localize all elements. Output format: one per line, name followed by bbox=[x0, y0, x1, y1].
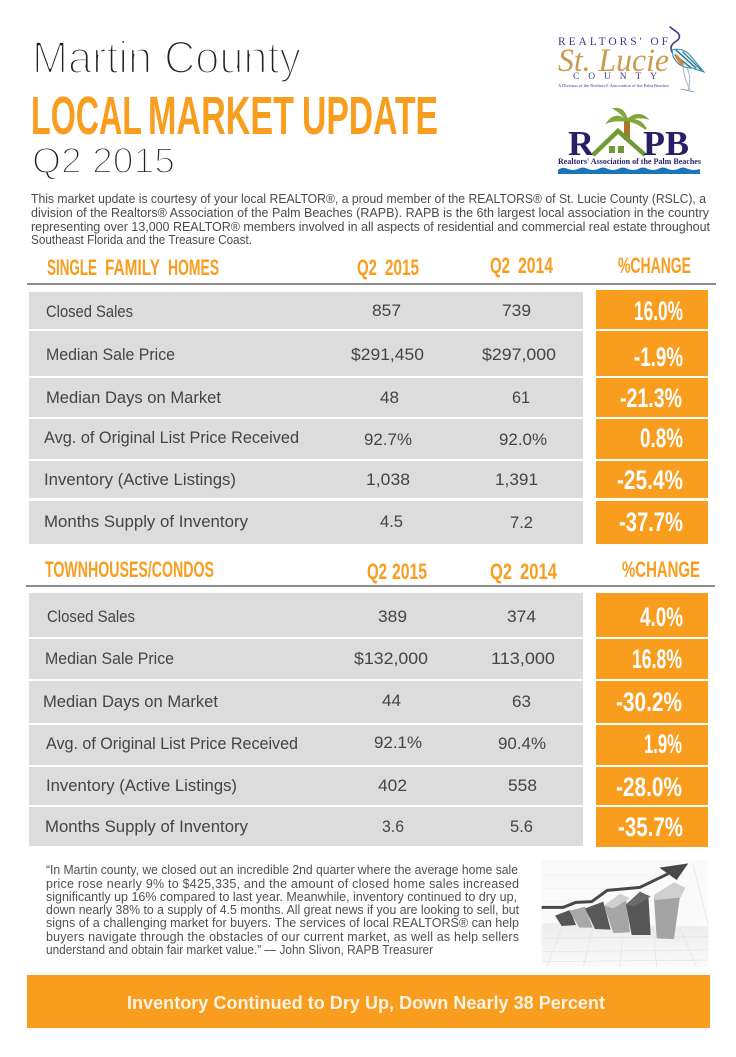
row: inventory: Inventory (Active Listings) bbox=[44, 470, 236, 489]
table header: single family homes: Q2 bbox=[357, 255, 377, 280]
row: average of original list price received: 92.0% bbox=[499, 430, 547, 449]
row: months supply: Months Supply of Inventory bbox=[44, 512, 248, 531]
row: median sale price bbox=[29, 331, 708, 376]
table header: single family homes: FAMILY bbox=[105, 255, 160, 280]
row: inventory bbox=[29, 461, 708, 498]
row: closed sales: 374 bbox=[507, 607, 536, 626]
row: average of original list price received: 92.1% bbox=[374, 733, 422, 752]
table header: townhouses and condos: Q2 bbox=[367, 559, 387, 584]
row: inventory: -25.4% bbox=[617, 465, 683, 495]
text block: quote: price rose nearly 9% to $425,335, and the amount of closed home sales increased bbox=[46, 877, 519, 891]
row: median sale price: -1.9% bbox=[634, 342, 683, 372]
row: average of original list price received: 90.4% bbox=[498, 734, 546, 753]
row: median days on market bbox=[29, 378, 708, 417]
row: closed sales: 857 bbox=[372, 301, 401, 320]
row: months supply: 7.2 bbox=[510, 513, 533, 532]
row: closed sales: Closed Sales bbox=[47, 607, 135, 626]
table header: single family homes: 2014 bbox=[518, 253, 554, 278]
text block: quote: significantly up 16% compared to last year. Meanwhile, inventory continued to dry up, bbox=[46, 890, 517, 904]
row: median sale price: $291,450 bbox=[351, 345, 424, 364]
row: inventory bbox=[29, 767, 708, 805]
text block: quote: “In Martin county, we closed out an incredible 2nd quarter where the average home sale bbox=[46, 863, 518, 877]
logo: Realtors of St. Lucie County: COUNTY bbox=[573, 72, 657, 82]
logo: Realtors of St. Lucie County bbox=[558, 27, 704, 92]
text block: quote: buyers navigate through the obstacles of our current market, as well as help sellers bbox=[46, 930, 519, 944]
row: closed sales: 389 bbox=[378, 607, 407, 626]
row: months supply: Months Supply of Inventory bbox=[45, 817, 248, 836]
row: average of original list price received bbox=[29, 419, 708, 459]
logo: RAPB: Realtors' Association of the Palm Beaches bbox=[558, 156, 702, 166]
bars bbox=[555, 910, 576, 926]
banner: inventory callout bbox=[27, 975, 710, 1028]
icon: house bbox=[593, 131, 645, 155]
subtitle: Q2 2015: Q2 2015 bbox=[32, 140, 175, 181]
logo: Realtors of St. Lucie County: A Division of the Realtors® Association of the Palm Beaches bbox=[558, 83, 669, 88]
row: months supply: 3.6 bbox=[382, 817, 404, 836]
row: inventory: 1,391 bbox=[495, 470, 538, 489]
row: average of original list price received bbox=[29, 725, 708, 765]
row: median sale price bbox=[29, 639, 708, 679]
table header: townhouses and condos: Q2 bbox=[490, 559, 512, 584]
table header: townhouses and condos: %CHANGE bbox=[622, 557, 700, 582]
row: months supply bbox=[29, 807, 708, 847]
panel: single family homes bbox=[27, 253, 716, 544]
row: months supply: 5.6 bbox=[510, 817, 533, 836]
row: months supply bbox=[29, 501, 708, 544]
arrow bbox=[542, 874, 668, 907]
row: median days on market: 63 bbox=[512, 692, 531, 711]
icon: palm tree bbox=[608, 109, 646, 140]
row: inventory: 402 bbox=[378, 776, 407, 795]
heading: Local Market Update bbox=[31, 86, 438, 146]
row: median sale price: 16.8% bbox=[632, 644, 682, 674]
table header: townhouses and condos bbox=[26, 557, 715, 587]
row: median sale price: $132,000 bbox=[354, 649, 428, 668]
table header: single family homes: HOMES bbox=[168, 255, 219, 280]
row: median sale price: Median Sale Price bbox=[45, 649, 174, 668]
icon: waves bbox=[558, 168, 700, 174]
row: closed sales bbox=[29, 593, 708, 637]
row: closed sales bbox=[29, 290, 708, 329]
table header: single family homes: Q2 bbox=[490, 253, 510, 278]
row: inventory: 1,038 bbox=[366, 470, 410, 489]
row: closed sales: 16.0% bbox=[634, 296, 683, 326]
logo: RAPB: PB bbox=[643, 124, 689, 163]
row: inventory: 558 bbox=[508, 776, 537, 795]
row: median days on market: 44 bbox=[382, 691, 401, 710]
logo: RAPB bbox=[558, 109, 702, 174]
row: median sale price: $297,000 bbox=[482, 345, 556, 364]
text block: quote: down nearly 38% to a supply of 4.5 months. All great news if you are looking to sell, but bbox=[46, 903, 520, 917]
row: average of original list price received: 92.7% bbox=[364, 430, 412, 449]
table header: single family homes bbox=[27, 253, 716, 285]
chart image: rising bars and arrow bbox=[542, 860, 708, 967]
row: inventory: Inventory (Active Listings) bbox=[46, 776, 237, 795]
row: median days on market bbox=[29, 681, 708, 723]
table header: townhouses and condos: TOWNHOUSES/CONDOS bbox=[45, 557, 214, 582]
table header: single family homes: 2015 bbox=[385, 255, 419, 280]
row: median days on market: Median Days on Market bbox=[46, 388, 221, 407]
text block: quote: signs of a challenging market for buyers. The services of local REALTORS® can help bbox=[46, 916, 519, 930]
row: median sale price: 113,000 bbox=[491, 649, 555, 668]
table header: single family homes: %CHANGE bbox=[618, 253, 691, 278]
row: months supply: -37.7% bbox=[619, 507, 683, 537]
text block: quote: understand and obtain fair market value.” — John Slivon, RAPB Treasurer bbox=[46, 943, 433, 957]
text block: introduction: division of the Realtors® Association of the Palm Beaches (RAPB). RAPB is the 6th largest local association in the country bbox=[31, 206, 710, 220]
row: median sale price: Median Sale Price bbox=[46, 345, 175, 364]
text block: quote bbox=[46, 863, 520, 957]
table header: single family homes: SINGLE bbox=[47, 255, 97, 280]
heading: Local Market Update: MARKET bbox=[148, 86, 294, 146]
row: average of original list price received: Avg. of Original List Price Received bbox=[46, 734, 298, 753]
row: average of original list price received: 1.9% bbox=[644, 729, 682, 759]
row: median days on market: -30.2% bbox=[616, 687, 682, 717]
row: median days on market: 61 bbox=[512, 388, 530, 407]
table header: townhouses and condos: 2014 bbox=[520, 559, 558, 584]
row: closed sales: 739 bbox=[502, 301, 531, 320]
logo: RAPB: R bbox=[568, 124, 595, 163]
panel: townhouses and condos bbox=[26, 557, 715, 847]
table header: townhouses and condos: 2015 bbox=[392, 559, 427, 584]
row: months supply: 4.5 bbox=[380, 512, 403, 531]
row: average of original list price received: 0.8% bbox=[640, 423, 683, 453]
row: average of original list price received: Avg. of Original List Price Received bbox=[44, 428, 299, 447]
heading: Local Market Update: UPDATE bbox=[302, 86, 438, 146]
text block: introduction bbox=[31, 192, 711, 247]
icon: heron bbox=[670, 27, 704, 92]
row: inventory: -28.0% bbox=[616, 772, 682, 802]
logo: Realtors of St. Lucie County: REALTORS' OF bbox=[558, 36, 668, 48]
banner: inventory callout: Inventory Continued to Dry Up, Down Nearly 38 Percent bbox=[127, 993, 605, 1013]
row: months supply: -35.7% bbox=[618, 812, 683, 842]
row: median days on market: Median Days on Market bbox=[43, 692, 218, 711]
row: closed sales: Closed Sales bbox=[46, 302, 133, 321]
text block: introduction: representing over 13,000 REALTOR® members involved in all aspects of residential and commercial real estate throughout bbox=[31, 220, 711, 234]
logo: Realtors of St. Lucie County: St. Lucie bbox=[558, 43, 669, 79]
row: median days on market: 48 bbox=[380, 388, 399, 407]
title: Martin County: Martin County bbox=[32, 32, 301, 83]
heading: Local Market Update: LOCAL bbox=[31, 86, 142, 146]
row: closed sales: 4.0% bbox=[640, 602, 683, 632]
text block: introduction: Southeast Florida and the Treasure Coast. bbox=[31, 233, 252, 247]
text block: introduction: This market update is courtesy of your local REALTOR®, a proud member of the REALTORS® of St. Lucie County (RSLC), a bbox=[31, 192, 706, 206]
row: median days on market: -21.3% bbox=[620, 383, 682, 413]
